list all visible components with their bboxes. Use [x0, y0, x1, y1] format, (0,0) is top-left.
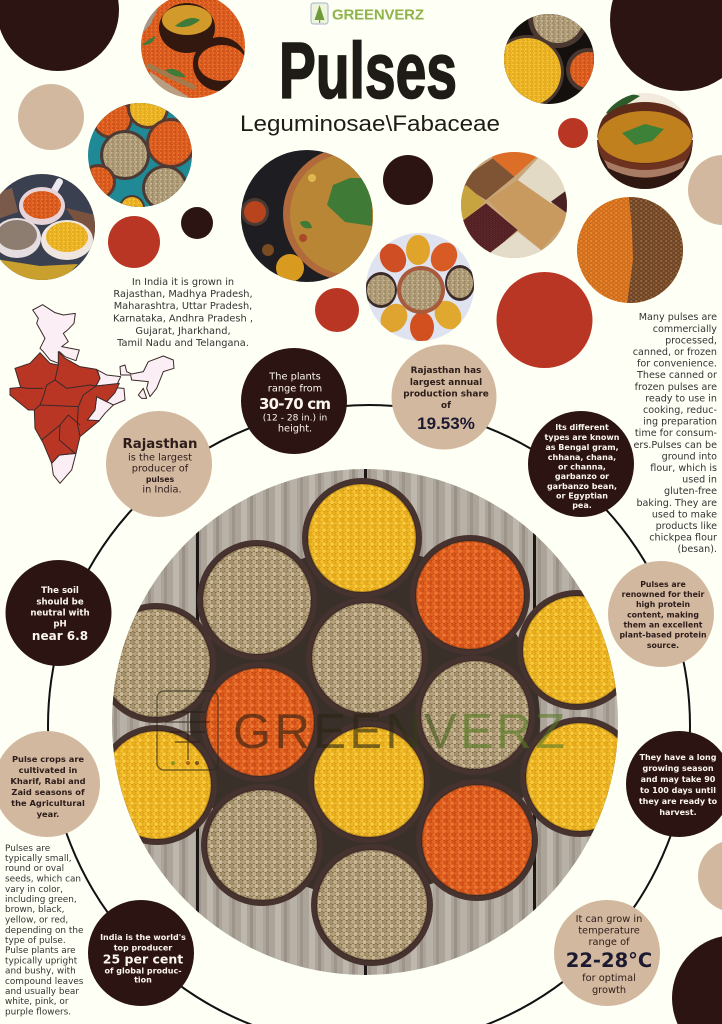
callout: soil: pH [53, 620, 67, 630]
bowl: yellow right upper [517, 590, 616, 710]
callout: different types: Its different [555, 423, 609, 432]
photo: lentil soup in clay bowl [596, 93, 694, 190]
text: description of pulses: vary in color, [5, 885, 63, 895]
callout: different types [528, 411, 634, 517]
text: description of pulses: and usually bear [5, 987, 79, 997]
callout: different types: garbanzo bean, [547, 482, 617, 491]
callout: production share: 19.53% [417, 414, 475, 433]
callout: temperature: It can grow in [576, 914, 642, 925]
map of India [10, 305, 174, 483]
photo: split orange and brown lentils [577, 197, 684, 304]
callout: soil: neutral with [30, 608, 90, 618]
text: processing of pulses: used to make [652, 510, 717, 520]
callout: Rajasthan largest producer: in India. [142, 484, 182, 496]
callout: world's top producer: tion [134, 976, 152, 984]
callout: growing seasons: Pulse crops are [12, 754, 84, 764]
callout: growing seasons: year. [37, 809, 59, 819]
bowl: yellow top [302, 478, 422, 598]
text: where pulses grow in India: Rajasthan, Madhya Pradesh, [113, 289, 253, 300]
callout: Rajasthan largest producer: Rajasthan [123, 437, 197, 452]
text: processing of pulses: processed, [665, 336, 717, 346]
text: description of pulses: typically small, [5, 854, 72, 864]
text: processing of pulses: cooking, reduc- [643, 405, 717, 416]
bowl: yellow right lower [520, 717, 618, 837]
callout: world's top producer: top producer [114, 944, 172, 952]
callout: different types: as Bengal gram, [545, 443, 619, 452]
text: processing of pulses: commercially [653, 324, 717, 335]
logo: Greenverz [311, 3, 424, 24]
text: where pulses grow in India: Tamil Nadu and Telangana. [116, 338, 249, 349]
callout: different types: or channa, [558, 462, 606, 472]
bowl: orange top right [410, 535, 530, 655]
logo: Greenverz: GREENVERZ [332, 6, 424, 24]
text: description of pulses: and bushy, with [5, 966, 76, 976]
callout: different types: chhana, chana, [548, 453, 616, 462]
text: processing of pulses: gluten-free [664, 486, 717, 497]
text: where pulses grow in India: Maharashtra, Uttar Pradesh, [114, 301, 252, 312]
callout: growing time: harvest. [659, 808, 697, 817]
text: description of pulses: depending on the [5, 926, 83, 936]
text: description of pulses: Pulses are [5, 844, 50, 854]
callout: soil [6, 560, 112, 666]
text: processing of pulses: baking. They are [636, 498, 717, 509]
text: description of pulses: brown, black, [5, 905, 64, 915]
callout: growing time: to 100 days until [640, 786, 716, 795]
text: processing of pulses: canned, or frozen [633, 347, 717, 358]
text: description of pulses: yellow, or red, [5, 916, 68, 926]
text: processing of pulses: ing preparation [643, 416, 717, 428]
callout: Rajasthan largest producer [106, 411, 212, 517]
callout: protein content: Pulses are [640, 580, 686, 589]
watermark: Greenverz [157, 691, 565, 770]
callout: protein content: them an excellent [623, 620, 703, 630]
title: Pulses [279, 26, 457, 114]
bowl: yellow center [308, 721, 430, 843]
callout: protein content: source. [647, 641, 679, 650]
text: processing of pulses: These canned or [636, 370, 717, 381]
text: processing of pulses: chickpea flour [649, 532, 717, 544]
text: processing of pulses: ground into [662, 452, 717, 462]
text: description of pulses [5, 844, 84, 1018]
bowl: tan top left [197, 540, 317, 660]
callout: temperature: growth [592, 985, 626, 996]
callout: protein content: content, making [627, 610, 699, 620]
subtitle: Leguminosae\Fabaceae [240, 111, 500, 136]
callout: protein content: high protein [636, 600, 690, 609]
text: description of pulses: seeds, which can [5, 874, 81, 884]
photo: yellow, tan and orange bowls [504, 14, 594, 104]
text: where pulses grow in India [113, 277, 253, 349]
callout: world's top producer: 25 per cent [103, 952, 183, 966]
callout: growing time: and may take 90 [641, 775, 716, 784]
callout: production share [392, 344, 496, 450]
text: processing of pulses: products like [656, 521, 717, 532]
bowl: tan far left [112, 603, 216, 723]
photo: mosaic of pulses [461, 152, 567, 258]
bowl: tan center [306, 597, 428, 719]
callout: plant height [241, 348, 347, 454]
callout: protein content: plant-based protein [619, 630, 707, 640]
callout: growing seasons: Zaid seasons of [11, 787, 85, 797]
callout: different types: pea. [572, 501, 592, 510]
text: where pulses grow in India: In India it is grown in [132, 277, 234, 288]
bowl: orange lower right [416, 779, 538, 901]
callout: world's top producer: India is the world's [100, 933, 186, 942]
callout: protein content [608, 561, 714, 667]
callout: growing time [626, 731, 722, 837]
callout: different types: types are known [545, 433, 620, 442]
photo: bowls arranged in a flower [365, 233, 475, 342]
callout: world's top producer: of global produc- [104, 966, 182, 976]
photo: dal with cilantro [241, 150, 373, 282]
text: processing of pulses: used in [682, 474, 717, 486]
callout: growing seasons: the Agricultural [11, 798, 85, 808]
callout: temperature: range of [588, 937, 630, 948]
callout: Rajasthan largest producer: producer of [132, 464, 189, 474]
callout: production share: production share [403, 390, 489, 400]
callout: world's top producer [88, 900, 194, 1006]
text: description of pulses: white, pink, or [5, 997, 69, 1007]
callout: protein content: renowned for their [622, 590, 705, 599]
photo: bowls on teal [88, 103, 192, 207]
text: processing of pulses: (besan). [678, 544, 717, 555]
text: description of pulses: Pulse plants are [5, 946, 76, 956]
bowl: yellow far left [113, 725, 217, 845]
text: description of pulses: compound leaves [5, 977, 84, 987]
main photo: bowls of lentils on wood [96, 469, 640, 975]
callout: temperature: 22-28°C [566, 949, 652, 972]
callout: different types: or Egyptian [556, 492, 608, 500]
callout: plant height: range from [268, 384, 322, 394]
text: description of pulses: purple flowers. [5, 1008, 71, 1018]
connector ring [48, 405, 690, 1024]
bowl: orange left [200, 662, 320, 782]
callout: temperature [554, 900, 660, 1006]
callout: plant height: 30-70 cm [259, 395, 331, 413]
callout: temperature: for optimal [582, 973, 636, 984]
callout: production share: of [441, 401, 451, 411]
callout: temperature: temperature [578, 926, 640, 936]
callout: soil: near 6.8 [32, 629, 88, 643]
callout: Rajasthan largest producer: is the largest [128, 452, 192, 464]
callout: growing time: they are ready to [639, 797, 718, 806]
text: processing of pulses: Many pulses are [639, 312, 717, 323]
callout: Rajasthan largest producer: pulses [146, 475, 175, 484]
text: processing of pulses [633, 312, 717, 555]
photo: soup and lentil bowls [141, 0, 247, 98]
text: processing of pulses: ers.Pulses can be [634, 440, 717, 451]
callout: plant height: The plants [268, 372, 321, 382]
photo: white bowls of lentils [0, 174, 95, 281]
text: processing of pulses: frozen pulses are [635, 382, 717, 393]
callout: soil: should be [36, 598, 84, 608]
callout: plant height: height. [278, 424, 312, 434]
bowl: tan lower left [201, 784, 323, 906]
callout: production share: Rajasthan has [411, 366, 481, 376]
text: description of pulses: type of pulse. [5, 936, 66, 946]
callout: growing seasons [0, 731, 100, 837]
text: where pulses grow in India: Karnataka, Andhra Pradesh , [113, 314, 253, 324]
callout: growing seasons: cultivated in [19, 765, 77, 775]
text: where pulses grow in India: Gujarat, Jharkhand, [135, 326, 231, 337]
text: description of pulses: including green, [5, 895, 77, 905]
text: processing of pulses: ready to use in [645, 394, 717, 404]
text: processing of pulses: for convenience. [637, 358, 717, 370]
callout: growing time: growing season [642, 764, 714, 773]
bowl: tan bottom [311, 844, 433, 966]
callout: growing time: They have a long [640, 753, 717, 762]
text: processing of pulses: flour, which is [650, 463, 717, 474]
text: processing of pulses: time for consum- [635, 428, 717, 439]
callout: production share: largest annual [410, 378, 482, 388]
text: description of pulses: typically upright [5, 956, 78, 966]
callout: plant height: (12 - 28 in.) in [263, 414, 327, 424]
text: description of pulses: round or oval [5, 864, 64, 874]
callout: growing seasons: Kharif, Rabi and [10, 776, 86, 786]
watermark: Greenverz: GREENVERZ [233, 705, 565, 759]
bowl: tan right [415, 655, 535, 775]
callout: soil: The soil [41, 586, 79, 596]
callout: different types: garbanzo or [555, 472, 609, 481]
